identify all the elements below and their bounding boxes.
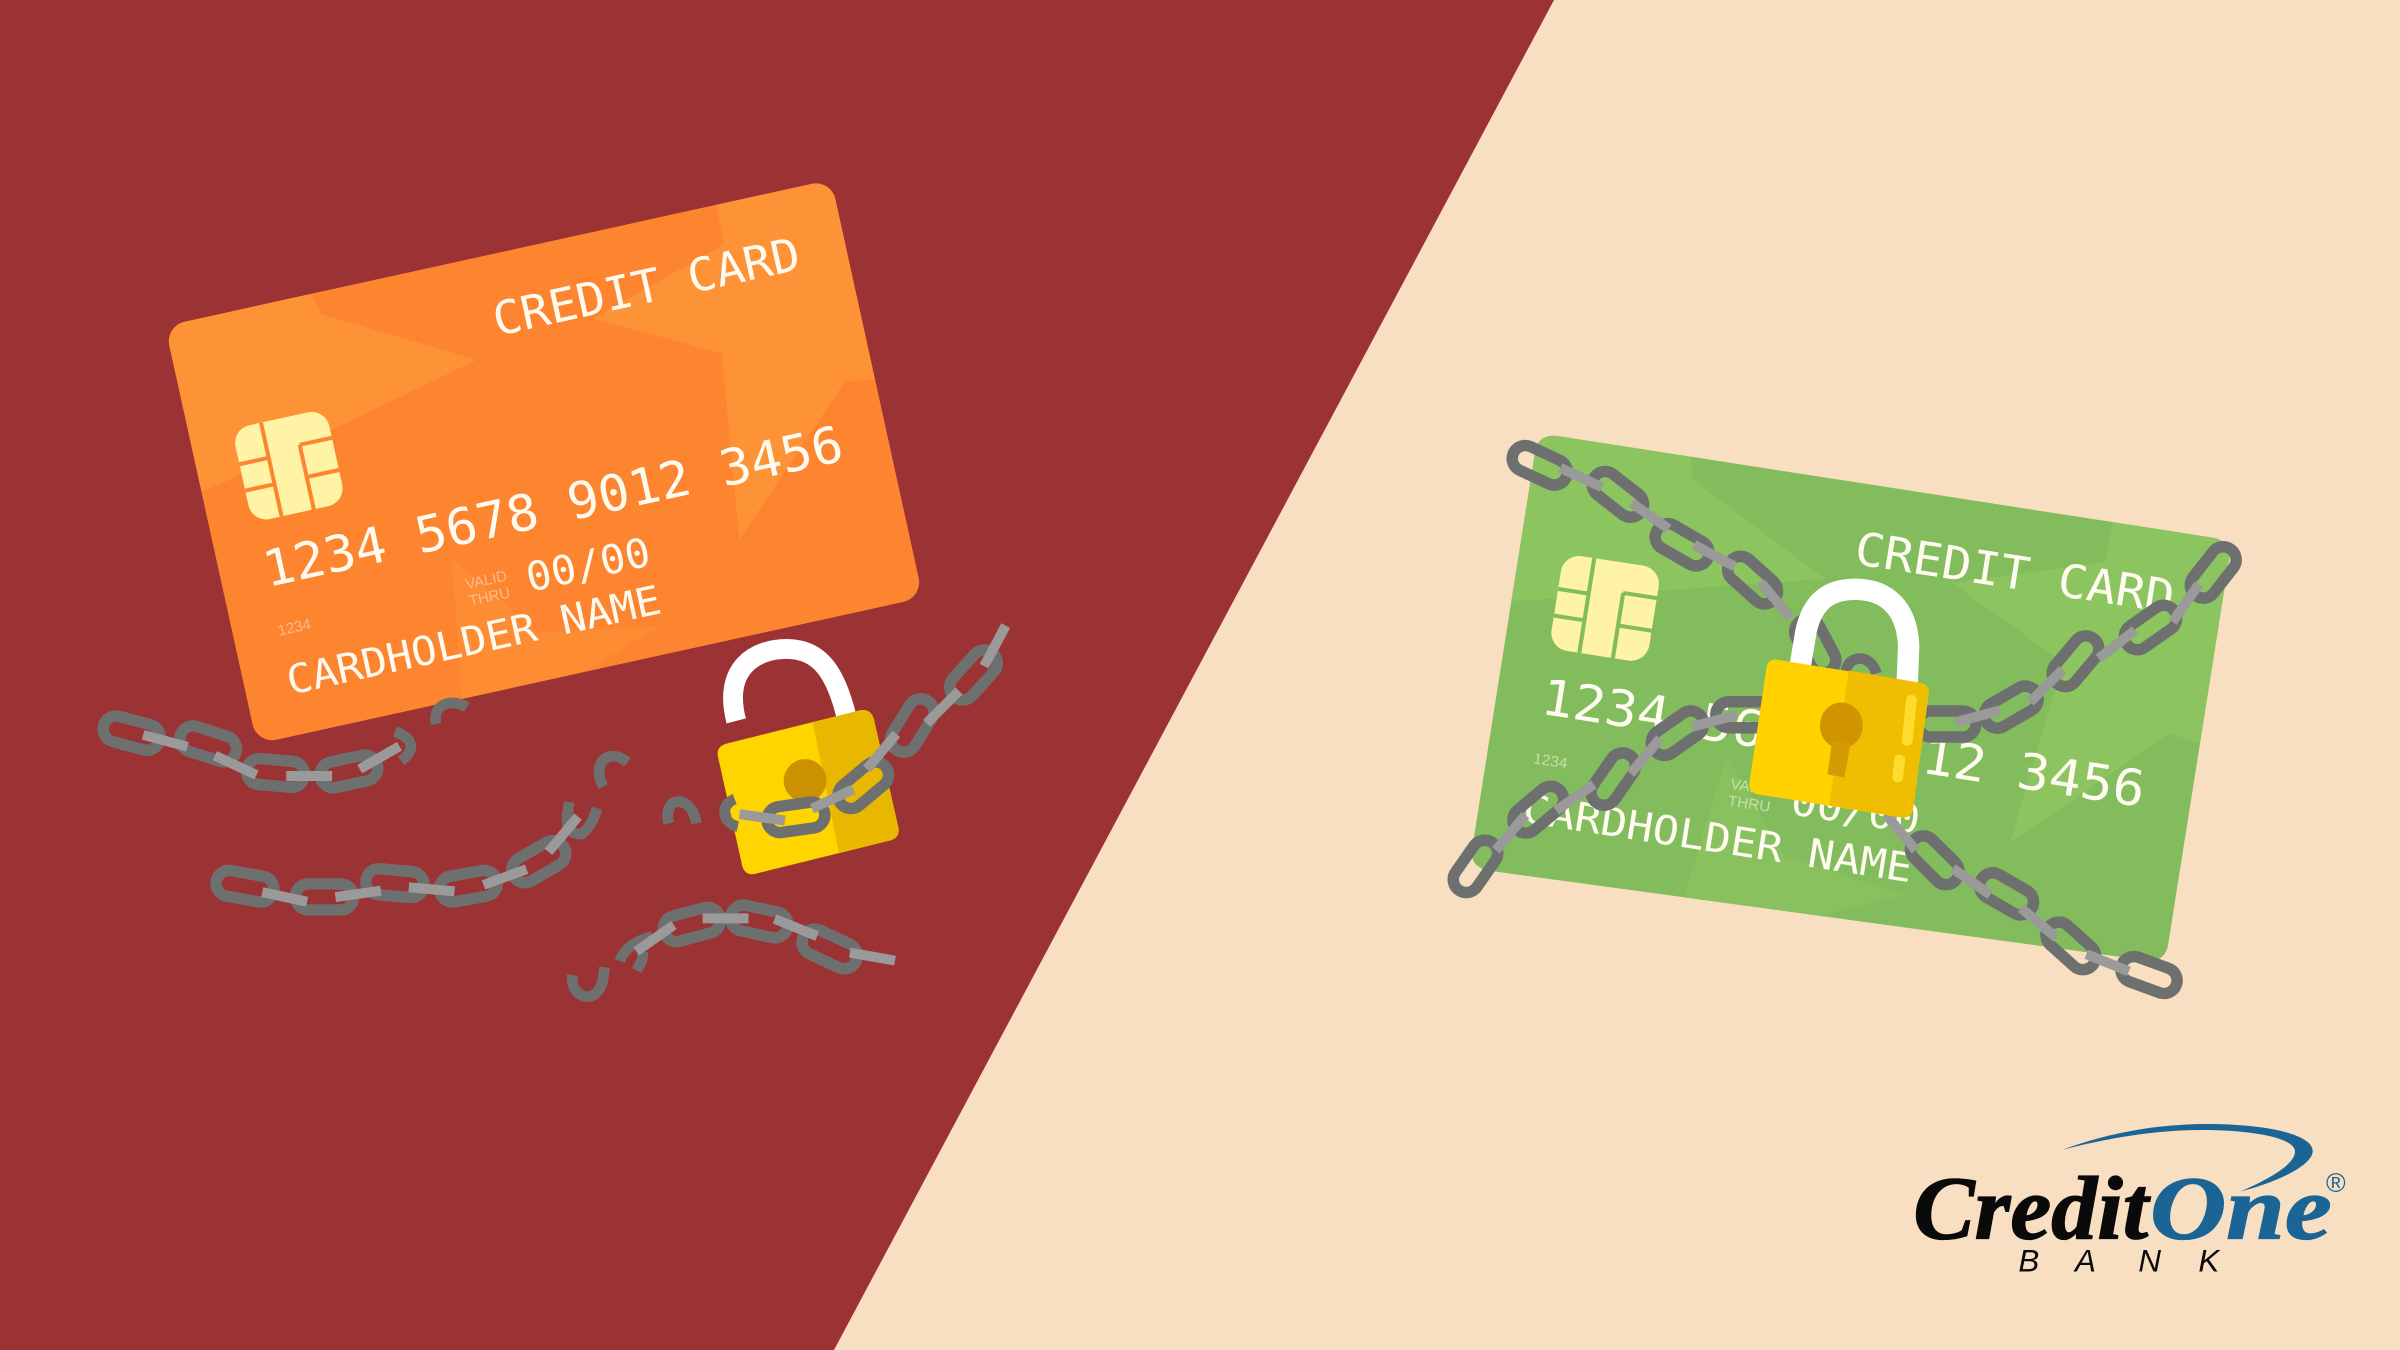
chain: upper broken chain (100, 713, 411, 790)
text: cardholder: CARDHOLDER NAME (1520, 785, 1916, 892)
panel: green credit card (1469, 433, 2232, 975)
text: card title: CREDIT CARD (488, 227, 805, 347)
text: small code: 1234 (1532, 750, 1569, 772)
text: valid thru: VALID (1729, 776, 1775, 799)
chain: top left diagonal (1508, 441, 1840, 678)
text: logo Credit: Credit (1913, 1159, 2151, 1258)
text: valid thru: THRU (1727, 793, 1772, 816)
chain: bottom right diagonal (1886, 815, 2181, 997)
chain: hook near lock left (668, 802, 696, 823)
text: card number: 1234 5678 9012 3456 (258, 415, 848, 599)
icon: open lock shackle (733, 649, 846, 721)
chain: lower broken chain (620, 903, 895, 973)
chain: hidden arc behind lock (1846, 659, 1877, 673)
text: small code: 1234 (276, 616, 313, 640)
text: card number: 1234 5678 9012 3456 (1538, 668, 2149, 819)
chain: broken hook under card (436, 703, 467, 724)
chain: top right diagonal (1918, 542, 2241, 737)
icon: closed lock shackle (1800, 589, 1909, 686)
background: red diagonal panel (0, 0, 1554, 1350)
text: cardholder: CARDHOLDER NAME (282, 578, 665, 705)
text: logo One: One (2150, 1159, 2332, 1258)
icon: closed lock body (1749, 659, 1929, 818)
text: valid thru: THRU (467, 584, 512, 610)
icon: logo swoosh (2062, 1124, 2313, 1192)
text: registered mark: ® (2326, 1168, 2346, 1198)
chain: hook near lock top (599, 756, 628, 787)
icon: open lock body (718, 710, 899, 874)
text: logo Bank: BANK (2018, 1244, 2221, 1279)
logo: Credit One Bank (1913, 1124, 2346, 1279)
text: expiry: 00/00 (522, 530, 655, 602)
panel: orange credit card (165, 180, 923, 744)
chain: chain around lock (725, 626, 1006, 834)
panel: right scene chains and lock (1448, 441, 2241, 997)
chain: middle broken chain (214, 802, 597, 910)
panel: left scene chains and lock (100, 626, 1006, 997)
icon: chip (232, 408, 346, 523)
chain: hook bottom (572, 967, 605, 997)
icon: chip (1549, 553, 1661, 663)
text: card title: CREDIT CARD (1851, 523, 2178, 625)
text: expiry: 00/00 (1788, 777, 1924, 844)
chain: bottom left diagonal (1448, 702, 1774, 898)
text: valid thru: VALID (464, 568, 509, 593)
